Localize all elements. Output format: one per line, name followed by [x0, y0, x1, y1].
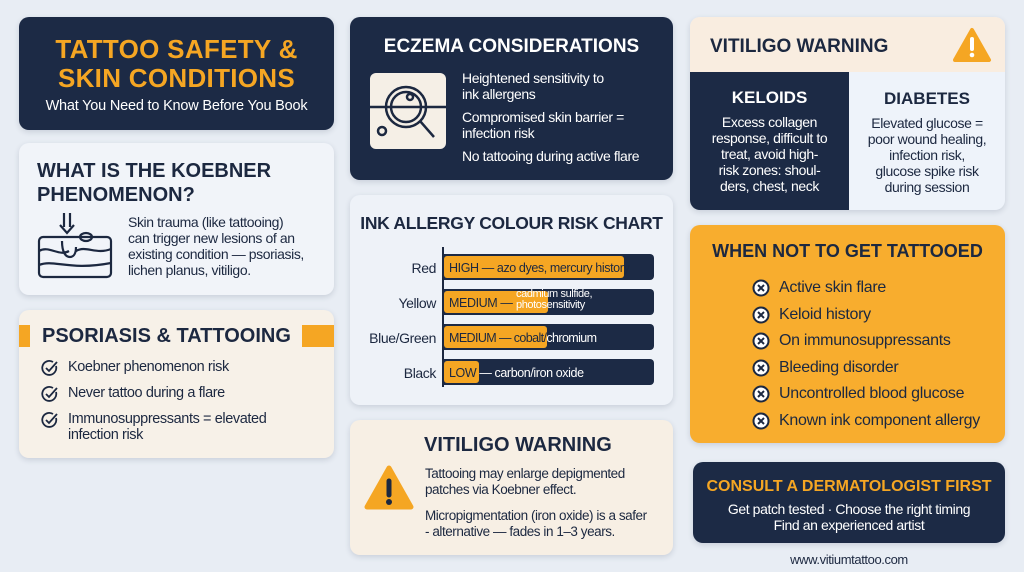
keloids: treat, avoid high- — [721, 146, 818, 162]
heading: psoriasis: PSORIASIS & TATTOOING — [42, 325, 291, 347]
heading: koebner — [37, 160, 271, 206]
keloids: response, difficult to — [712, 130, 827, 146]
bar chart: MEDIUM — cobalt/chromium — [449, 331, 596, 345]
list: when not: Uncontrolled blood glucose — [779, 385, 964, 402]
bar chart: Red — [412, 260, 436, 276]
diabetes: poor wound healing, — [868, 131, 986, 147]
text: vitiligo: patches via Koebner effect. Micropigmentation (iron oxide) is a safer — [425, 482, 647, 523]
list: psoriasis — [41, 359, 266, 443]
keloids: KELOIDS — [732, 88, 807, 107]
heading: vitiligo top: VITILIGO WARNING — [710, 36, 888, 57]
heading: koebner: WHAT IS THE KOEBNER — [37, 160, 271, 182]
panel: vitiligo/keloids/diabetes — [690, 17, 1005, 210]
list: when not: Bleeding disorder — [779, 358, 898, 376]
text: koebner: lichen planus, vitiligo. — [128, 262, 251, 278]
icon: warning triangle — [953, 28, 992, 62]
panel: koebner — [19, 143, 334, 295]
text: koebner: existing condition — psoriasis, — [128, 246, 304, 262]
heading: koebner: PHENOMENON? — [37, 184, 195, 206]
text: vitiligo: Tattooing may enlarge depigmented — [425, 466, 625, 481]
panel: psoriasis — [19, 310, 334, 458]
diabetes: infection risk, — [889, 147, 965, 163]
list: psoriasis: Never tattoo during a flare — [68, 385, 225, 401]
panel: eczema — [350, 17, 673, 180]
panel: ink chart — [350, 195, 673, 405]
list: psoriasis: infection risk — [68, 427, 143, 443]
panel: consult — [693, 462, 1005, 543]
bar chart: cadmium sulfide, — [516, 288, 592, 300]
bar chart: photosensitivity — [516, 299, 585, 311]
icon: warning — [364, 466, 414, 510]
title: SKIN CONDITIONS — [58, 63, 295, 93]
bar chart: MEDIUM — — [449, 296, 512, 310]
diabetes — [868, 89, 986, 195]
list: psoriasis: Immunosuppressants = elevated — [68, 411, 266, 427]
heading: when not: WHEN NOT TO GET TATTOOED — [712, 241, 983, 261]
text: eczema — [462, 70, 639, 164]
text: eczema: ink allergens Compromised skin barrier = — [462, 86, 624, 125]
text: consult: Find an experienced artist — [774, 517, 924, 533]
heading: vitiligo: VITILIGO WARNING — [424, 434, 612, 456]
keloids: Excess collagen — [722, 114, 817, 130]
title: TATTOO SAFETY & — [55, 34, 298, 64]
heading: chart: INK ALLERGY COLOUR RISK CHART — [360, 213, 663, 233]
diabetes: DIABETES — [884, 89, 970, 108]
list: when not: Active skin flare — [779, 279, 886, 296]
text: consult — [728, 501, 970, 533]
list: when not: Keloid history — [779, 306, 871, 322]
keloids: risk zones: shoul- — [719, 162, 820, 178]
text: consult: Get patch tested · Choose the right timing — [728, 501, 970, 517]
panel: when not — [690, 225, 1005, 443]
icon: magnifier — [370, 73, 446, 149]
url: www.vitiumtattoo.com — [790, 552, 908, 567]
icon: skin layers — [38, 213, 112, 278]
list: when not — [752, 279, 980, 430]
list: when not: Known ink component allergy — [779, 412, 980, 428]
panel: vitiligo bottom — [350, 420, 673, 555]
bar chart: Yellow — [398, 295, 436, 311]
text: koebner: Skin trauma (like tattooing) — [128, 214, 283, 230]
panel: title — [19, 17, 334, 130]
text: koebner: can trigger new lesions of an — [128, 230, 295, 246]
text: eczema: Heightened sensitivity to — [462, 70, 604, 86]
heading: consult: CONSULT A DERMATOLOGIST FIRST — [706, 478, 992, 495]
text: eczema: infection risk No tattooing during active flare — [462, 125, 639, 164]
bar chart: LOW — carbon/iron oxide — [449, 366, 584, 380]
text: vitiligo — [425, 466, 647, 539]
heading: eczema: ECZEMA CONSIDERATIONS — [384, 36, 639, 57]
text: vitiligo: - alternative — fades in 1–3 years. — [425, 524, 615, 539]
bar chart: HIGH — azo dyes, mercury history — [449, 261, 629, 275]
keloids — [690, 72, 849, 210]
bar chart — [369, 247, 654, 387]
diabetes: during session — [885, 179, 969, 195]
list: when not: On immunosuppressants — [779, 332, 951, 349]
keloids: ders, chest, neck — [720, 178, 819, 194]
bar chart: Black — [404, 365, 436, 381]
diabetes: Elevated glucose = — [871, 115, 983, 131]
list: psoriasis: Koebner phenomenon risk — [68, 359, 229, 375]
text: koebner — [128, 214, 304, 278]
title — [55, 34, 298, 93]
subtitle: What You Need to Know Before You Book — [46, 98, 307, 114]
diabetes: glucose spike risk — [875, 163, 979, 179]
bar chart: Blue/Green — [369, 330, 436, 346]
